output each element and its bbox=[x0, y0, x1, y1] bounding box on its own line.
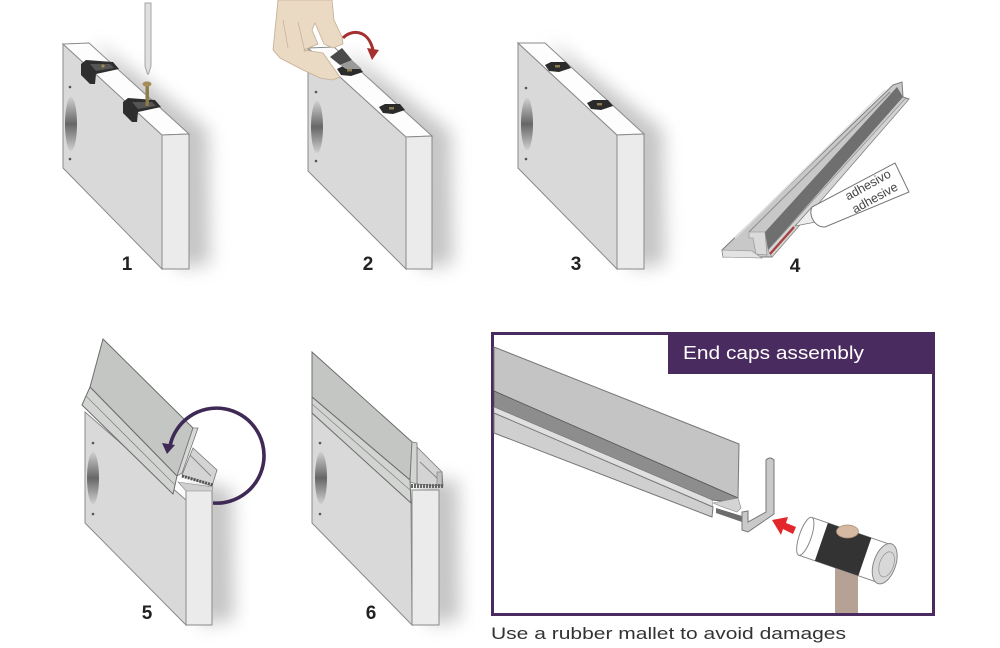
panel: step 5 rotating profile bbox=[82, 339, 264, 625]
icon: clip rear bbox=[81, 60, 119, 84]
panel: step 4 rail and adhesive bbox=[722, 82, 909, 277]
profile mounted bbox=[312, 352, 443, 503]
step number 1: 1 bbox=[122, 254, 133, 275]
profile rear section bbox=[182, 448, 217, 486]
icon: flat clip near bbox=[337, 66, 363, 76]
icon: screw bbox=[142, 81, 152, 106]
caption: Use a rubber mallet to avoid damages bbox=[491, 624, 846, 643]
arrow: purple rotation bbox=[162, 408, 264, 503]
step number 6: 6 bbox=[366, 603, 376, 624]
icon: clip near bbox=[587, 100, 613, 110]
board top wedge bbox=[178, 482, 213, 491]
icon: clip being folded bbox=[330, 48, 362, 69]
step number 5: 5 bbox=[142, 603, 153, 624]
panel: step 6 mounted profile bbox=[312, 352, 460, 625]
header band bbox=[668, 333, 935, 374]
red adhesive line bbox=[770, 227, 794, 254]
arrow: red direction bbox=[772, 517, 796, 535]
step number 4: 4 bbox=[790, 256, 801, 277]
icon: rubber mallet bbox=[793, 515, 902, 613]
icon: hand bbox=[273, 0, 343, 80]
panel: end caps assembly bbox=[492, 333, 935, 614]
panel: step 2 board with hand bbox=[273, 0, 453, 275]
icon: clip front bbox=[123, 98, 161, 122]
tube of adhesive bbox=[795, 163, 909, 227]
end cap bbox=[742, 458, 774, 532]
panel: step 3 board with clips bbox=[518, 42, 665, 275]
icon: flat clip far bbox=[379, 104, 405, 114]
icon: clip far bbox=[545, 62, 571, 72]
profile blade tilted bbox=[82, 339, 198, 494]
rail bbox=[722, 82, 909, 258]
tube of adhesive: adhesive bbox=[850, 180, 900, 216]
step number 2: 2 bbox=[363, 254, 373, 275]
icon: screwdriver bbox=[145, 3, 151, 74]
tube of adhesive: adhesivo bbox=[843, 167, 893, 203]
header band: End caps assembly bbox=[683, 342, 865, 363]
panel: step 1 board with screw bbox=[63, 3, 210, 275]
step number 3: 3 bbox=[571, 254, 581, 275]
arrow: red rotation bbox=[343, 32, 379, 60]
aluminium profile bbox=[494, 347, 742, 522]
